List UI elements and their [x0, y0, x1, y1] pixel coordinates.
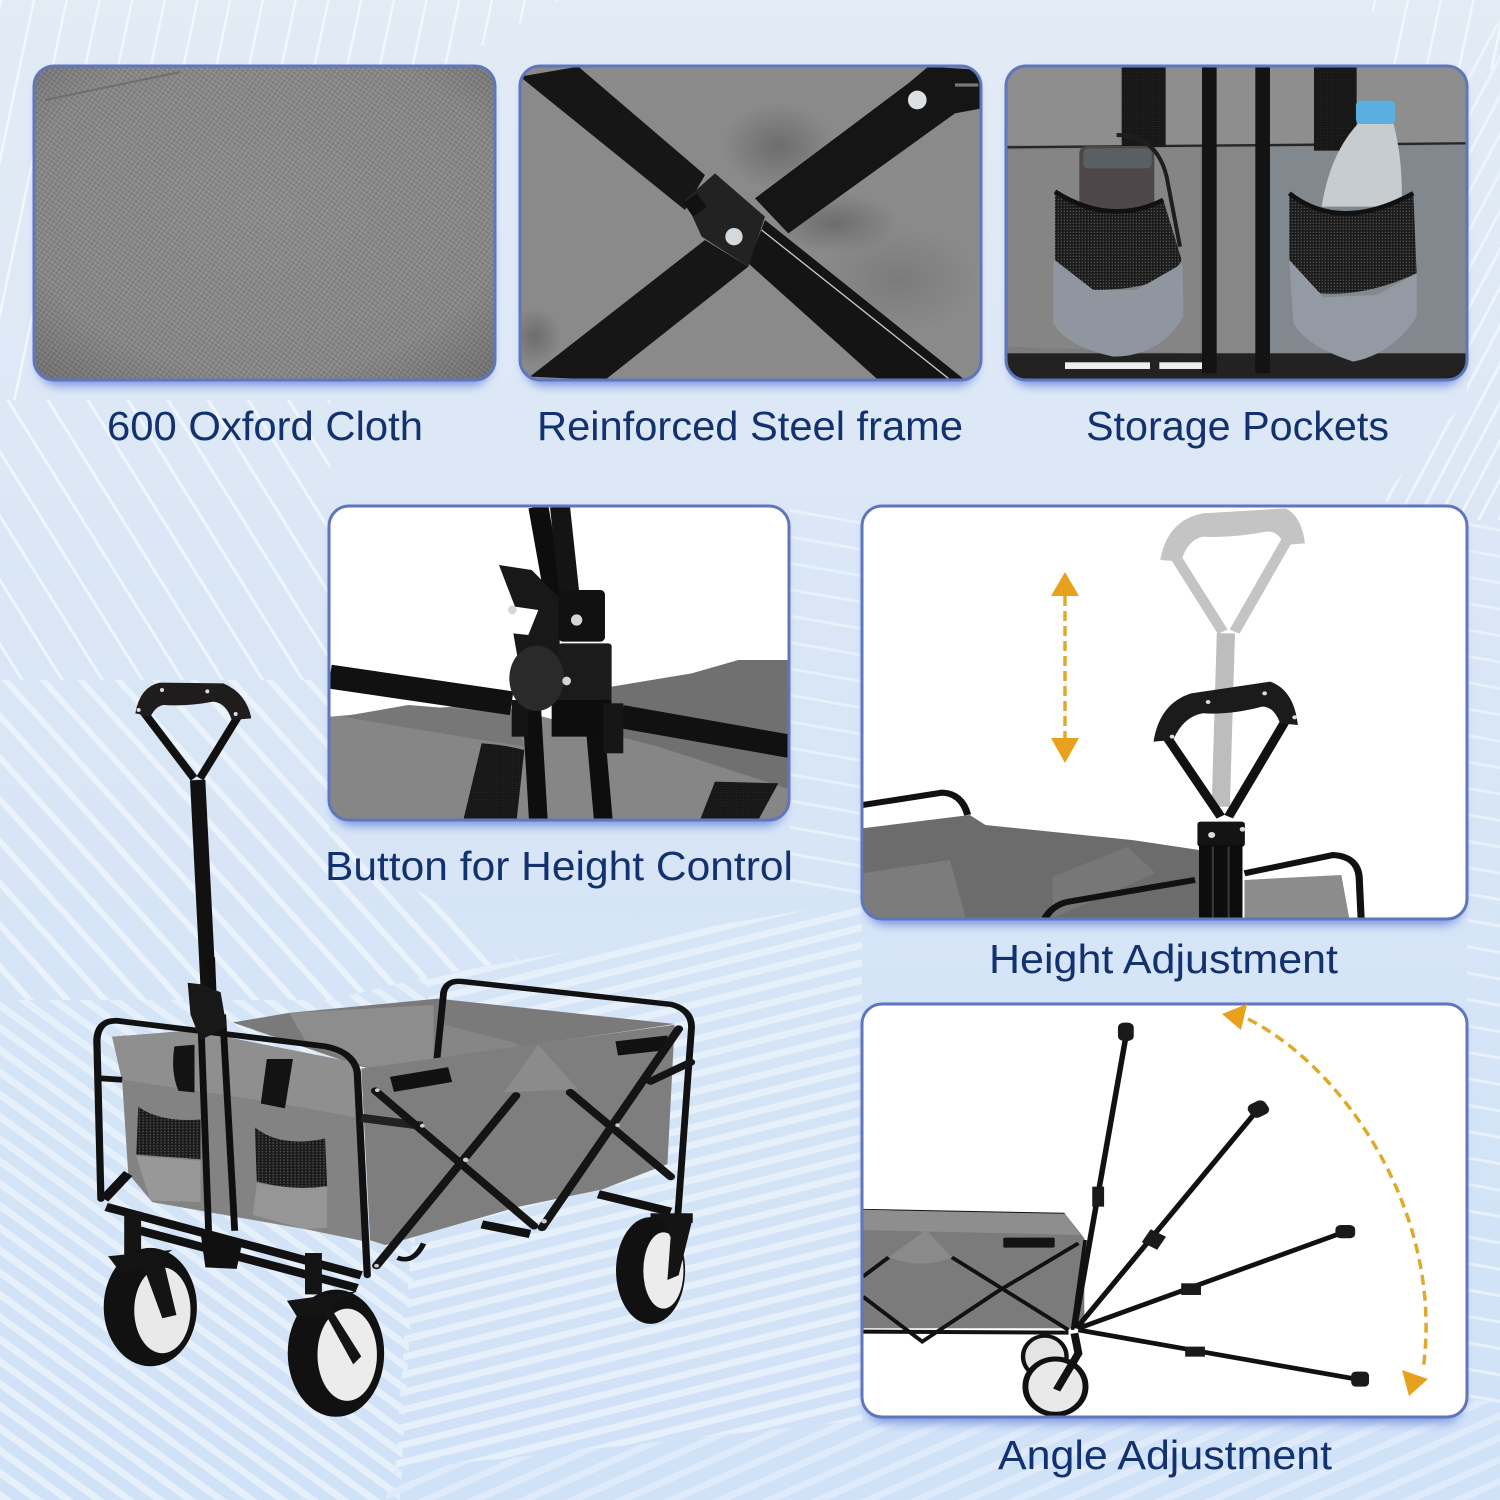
base rails — [104, 1174, 671, 1288]
small wagon — [863, 1210, 1084, 1328]
wheel forks — [108, 1250, 176, 1318]
bottle and flask — [1079, 146, 1154, 214]
long side fabric — [361, 1025, 675, 1245]
heading: Height Adjustment: Height Adjustment — [989, 936, 1339, 982]
panel: storage pockets — [1000, 60, 1480, 390]
panel: height adjustment — [862, 506, 1467, 925]
far rail — [437, 981, 692, 1215]
X braces — [375, 1029, 691, 1266]
heading: Button for Height Control: Button for Height Control — [325, 843, 793, 889]
main wagon photo — [97, 683, 693, 1417]
heading: Storage Pockets: Storage Pockets — [1086, 403, 1389, 449]
joint — [685, 173, 765, 267]
four handle angles — [1074, 1030, 1361, 1380]
panel: height control button — [329, 506, 792, 826]
wheels — [104, 1248, 197, 1366]
side pockets — [136, 1107, 201, 1159]
mesh pockets — [1055, 192, 1182, 290]
front rail — [97, 1021, 367, 1275]
upper left and lower right beam — [520, 67, 705, 210]
faded raised handle — [1173, 538, 1288, 632]
poles — [201, 957, 235, 1231]
lower left and upper right beam — [530, 240, 748, 380]
straps — [173, 1045, 195, 1092]
wagon fabric — [863, 815, 1199, 918]
short side fabric — [112, 1030, 367, 1242]
wagon handle — [135, 683, 251, 990]
interior fabric — [233, 999, 675, 1069]
panel: reinforced steel frame — [508, 60, 990, 390]
arrow: angle adjustment — [1222, 1004, 1428, 1396]
heading: Reinforced Steel frame: Reinforced Steel frame — [537, 403, 963, 449]
panel: angle adjustment — [862, 1004, 1467, 1423]
heading: Angle Adjustment: Angle Adjustment — [998, 1432, 1333, 1478]
panel: 600 Oxford cloth — [34, 66, 495, 386]
arrow: height adjustment — [1051, 572, 1079, 763]
small wheels — [1023, 1336, 1067, 1377]
heading: 600 Oxford Cloth: 600 Oxford Cloth — [107, 403, 423, 449]
black lowered handle — [1165, 717, 1288, 817]
